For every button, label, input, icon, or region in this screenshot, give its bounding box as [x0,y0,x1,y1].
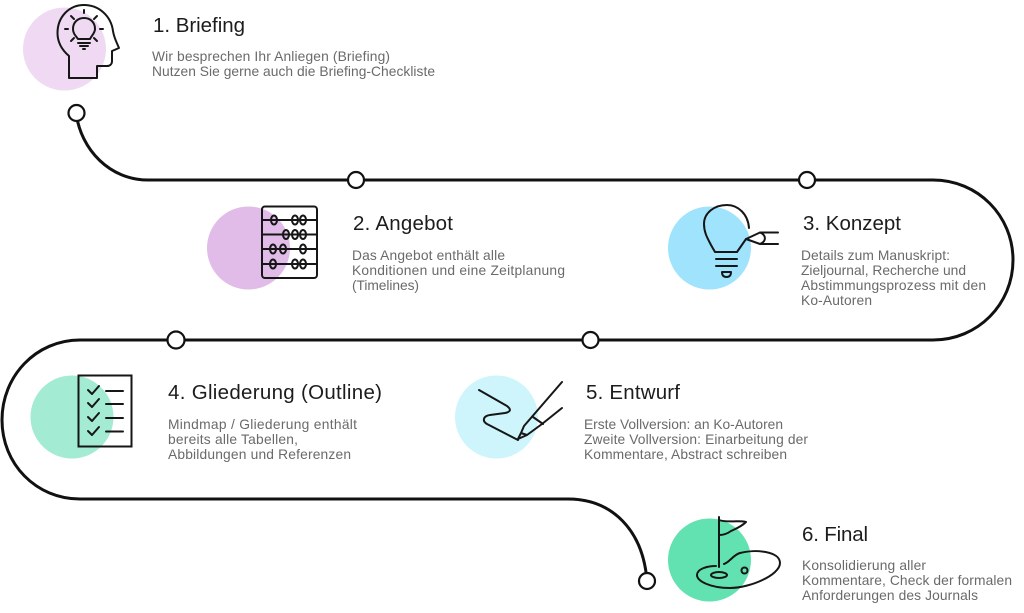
description: Ko-Autoren [801,293,872,308]
description: (Timelines) [352,278,419,293]
node: step 4 [168,332,184,348]
description: Mindmap / Gliederung enthält [168,417,357,432]
heading: 6. Final [802,523,868,546]
icon: pen drawing a line [455,376,562,458]
panel: step 5 Entwurf [455,376,808,462]
node: step 3 [799,172,815,188]
description [168,417,357,462]
heading: 2. Angebot [353,212,453,235]
icon: abacus [207,206,317,290]
description: Abbildungen und Referenzen [168,447,351,462]
description: Details zum Manuskript: [801,248,950,263]
icon: head with light bulb [23,5,119,90]
description: bereits alle Tabellen, [168,432,298,447]
description: Zieljournal, Recherche und [801,263,966,278]
description: Erste Vollversion: an Ko-Autoren [584,417,783,432]
description: Wir besprechen Ihr Anliegen (Briefing) [152,49,390,64]
panel: step 4 Gliederung [30,376,382,462]
description: Kommentare, Check der formalen [802,573,1012,588]
heading: 4. Gliederung (Outline) [168,381,382,404]
timeline path [2,113,1013,581]
description: Abstimmungsprozess mit den [801,278,986,293]
panel: step 6 Final [668,517,1012,603]
description: Das Angebot enthält alle [352,248,505,263]
description [801,248,986,308]
node: step 2 [348,172,364,188]
heading: 1. Briefing [153,14,245,37]
panel: step 3 Konzept [668,205,986,308]
icon: golf flag and green [668,517,780,602]
icon: bulb being drawn [668,205,778,290]
node: end [639,573,655,589]
description: Anforderungen des Journals [802,588,978,603]
icon: checklist [30,376,132,458]
panel: step 1 Briefing [23,5,435,90]
node: step 5 [582,332,598,348]
heading: 3. Konzept [803,212,901,235]
description: Zweite Vollversion: Einarbeitung der [584,432,808,447]
description [584,417,808,462]
description [352,248,565,293]
description [802,558,1012,603]
description: Kommentare, Abstract schreiben [584,447,787,462]
node: start [68,105,84,121]
description: Nutzen Sie gerne auch die Briefing-Checkliste [152,64,435,79]
panel: step 2 Angebot [207,206,565,293]
description: Konsolidierung aller [802,558,926,573]
description [152,49,435,79]
description: Konditionen und eine Zeitplanung [352,263,565,278]
heading: 5. Entwurf [586,381,680,404]
timeline [2,105,1013,589]
